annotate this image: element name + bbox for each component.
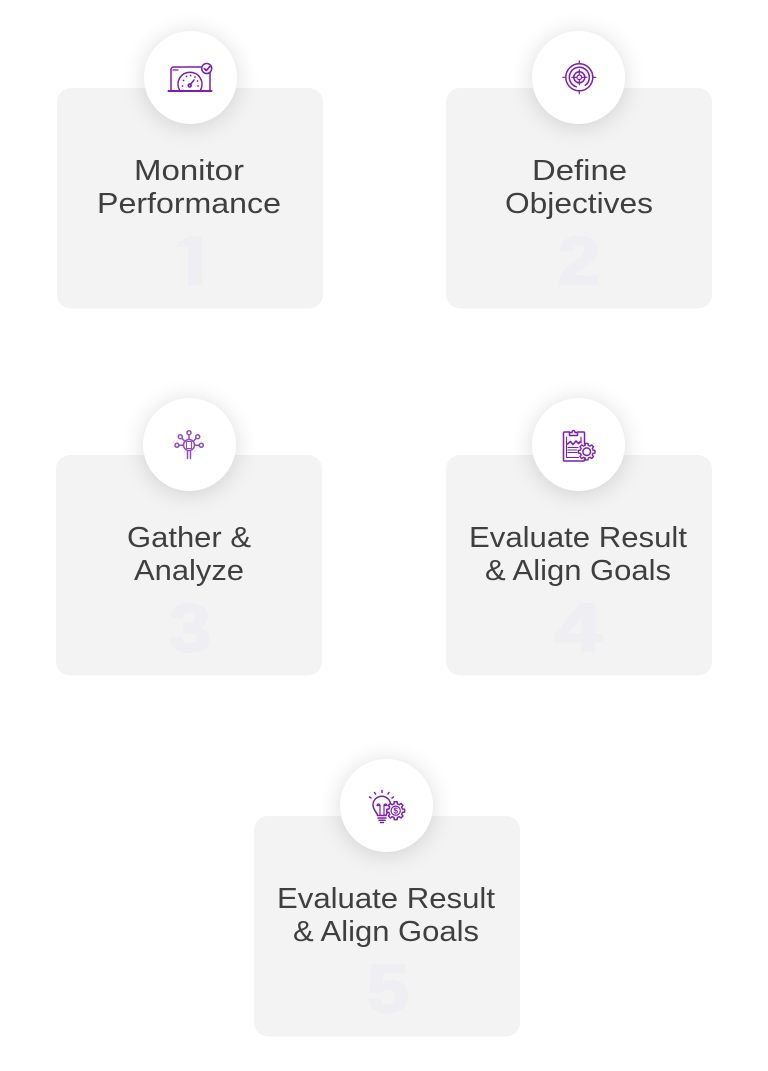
heading: evaluate result and align goals: & Align Goals xyxy=(485,555,671,587)
panel: step 3 gather and analyze xyxy=(56,398,322,676)
panel: step 5 evaluate result xyxy=(254,759,520,1036)
heading: evaluate result and align goals: Evaluate Result xyxy=(277,883,495,915)
heading: evaluate result and align goals: & Align Goals xyxy=(293,916,479,948)
heading: gather and analyze xyxy=(127,522,251,587)
icon badge: data network xyxy=(143,398,236,494)
icon badge: light bulb and dollar gear xyxy=(340,759,433,854)
panel: step 1 monitor performance xyxy=(57,31,323,308)
number 5: 5 xyxy=(367,951,409,1027)
heading: evaluate result and align goals xyxy=(469,522,687,587)
heading: gather and analyze: Gather & xyxy=(127,522,251,554)
number 4: 4 xyxy=(555,590,602,666)
icon badge: laptop gauge xyxy=(144,31,237,126)
icon badge: light bulb and dollar gear: $ xyxy=(393,807,398,816)
number 1: 1 xyxy=(170,223,216,299)
heading: monitor performance: Performance xyxy=(97,188,281,220)
heading: define objectives: Objectives xyxy=(505,188,653,220)
heading: define objectives: Define xyxy=(532,155,627,187)
panel: step 2 define objectives xyxy=(446,31,712,308)
heading: define objectives xyxy=(505,155,653,220)
heading: monitor performance xyxy=(97,155,281,220)
number 3: 3 xyxy=(169,590,211,666)
heading: evaluate result and align goals: Evaluate Result xyxy=(469,522,687,554)
number 2: 2 xyxy=(558,223,600,299)
heading: evaluate result and align goals xyxy=(277,883,495,948)
heading: gather and analyze: Analyze xyxy=(134,555,244,587)
panel: step 4 evaluate result xyxy=(446,398,712,676)
icon badge: clipboard and gear xyxy=(532,398,625,494)
icon badge: target xyxy=(532,31,625,126)
heading: monitor performance: Monitor xyxy=(134,155,244,187)
